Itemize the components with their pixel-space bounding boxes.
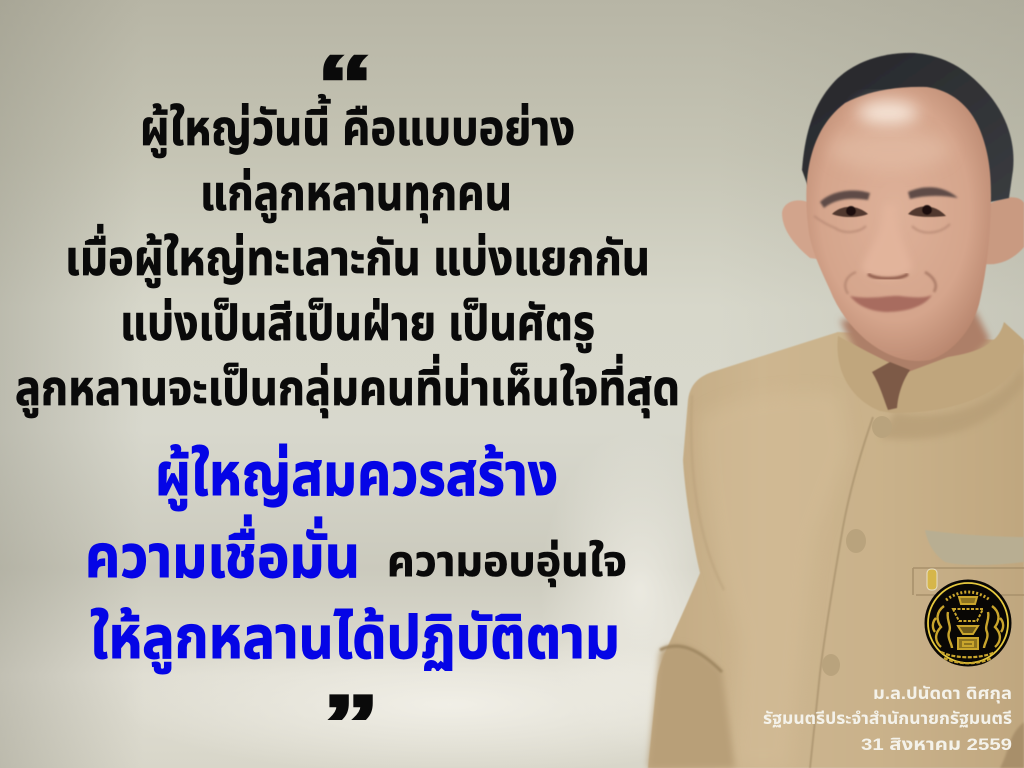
right arm fold [1000,722,1024,768]
closing quotation mark: ” [323,679,379,768]
sleeve seam [691,395,724,590]
line 6: ผู้ใหญ่สมควรสร้าง [155,441,558,511]
jacket front seam [810,417,873,768]
line 2: แก่ลูกหลานทุกคน [200,167,512,223]
line 4: แบ่งเป็นสีเป็นฝ่าย เป็นศัตรู [120,297,595,353]
bowl tiers [959,597,977,604]
quote: blue emphasis lines [85,441,620,674]
eyebrows [820,187,958,208]
face [806,87,991,361]
line 1: ผู้ใหญ่วันนี้ คือแบบอย่าง [140,94,575,158]
portrait of the minister [648,53,1024,768]
line 3: เมื่อผู้ใหญ่ทะเลาะกัน แบ่งแยกกัน [65,224,650,288]
pedestal [958,638,978,649]
eyes [832,205,946,217]
ears [782,197,1024,264]
forehead highlight [858,101,918,125]
hair [802,53,1013,202]
sleeve [648,645,735,768]
line 7 blue: ความเชื่อมั่น [85,514,360,590]
left lion [933,606,952,648]
neck [840,310,990,395]
collar opening [872,362,910,410]
right lion [984,606,1003,648]
line 5: ลูกหลานจะเป็นกลุ่มคนที่น่าเห็นใจที่สุด [15,354,680,418]
quote: black lines [15,94,680,418]
line 8: ให้ลูกหลานได้ปฏิบัติตาม [90,604,620,674]
lapel pin [927,569,937,590]
jacket [648,332,1024,768]
name: ม.ล.ปนัดดา ดิศกุล [873,684,1012,704]
collar [837,322,1024,439]
position: รัฐมนตรีประจำสำนักนายกรัฐมนตรี [763,709,1012,728]
seal emblem [933,592,1003,663]
attribution [763,684,1012,754]
nose [862,205,912,278]
top laurel arc [946,592,990,600]
base ribbon [941,652,995,663]
government seal [924,580,1012,666]
under-eye folds [814,216,950,233]
jacket buttons [822,416,892,676]
line 7 black: ความอบอุ่นใจ [387,538,627,587]
pocket and handkerchief [913,530,1024,595]
opening quotation mark: “ [317,39,373,130]
smile [845,272,936,312]
date: 31 สิงหาคม 2559 [861,735,1012,754]
